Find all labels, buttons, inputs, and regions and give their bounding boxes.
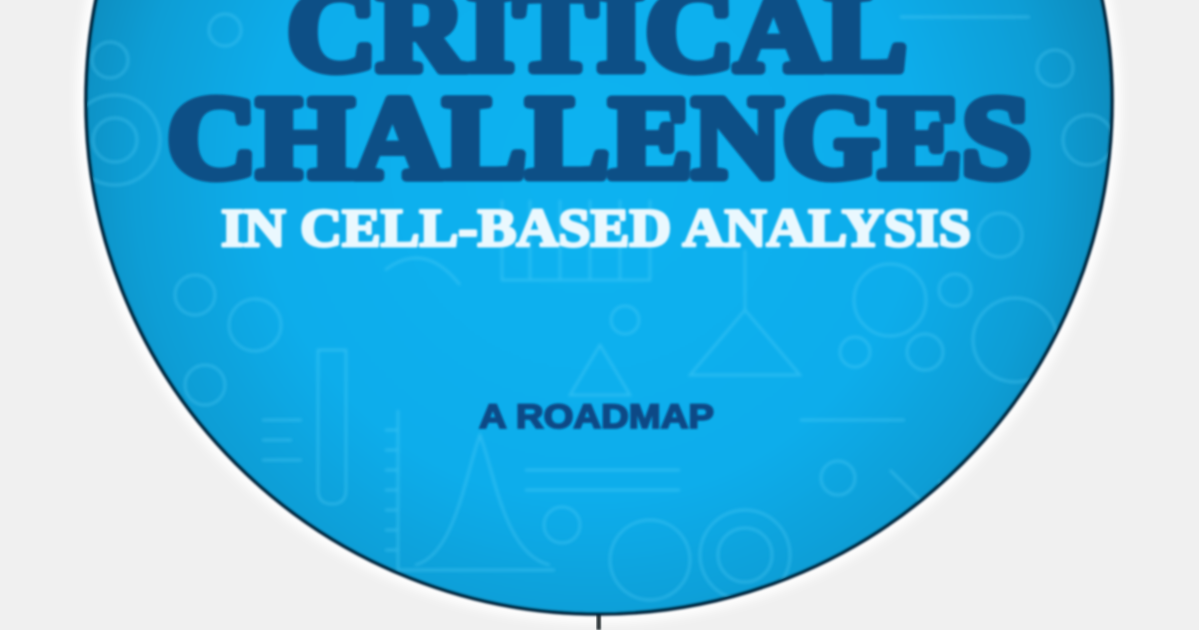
title line: CHALLENGES: CHALLENGES <box>167 72 1031 203</box>
roadmap stem <box>596 612 601 630</box>
subtitle: IN CELL-BASED ANALYSIS <box>221 198 971 258</box>
pattern: left side rings <box>70 14 281 405</box>
pattern: right side cells <box>544 17 1113 600</box>
pattern: flask and well plate <box>385 200 905 490</box>
title <box>167 0 1031 258</box>
tagline: A ROADMAP: A ROADMAP <box>479 398 714 436</box>
pattern: test tube and thermometer <box>262 350 555 570</box>
